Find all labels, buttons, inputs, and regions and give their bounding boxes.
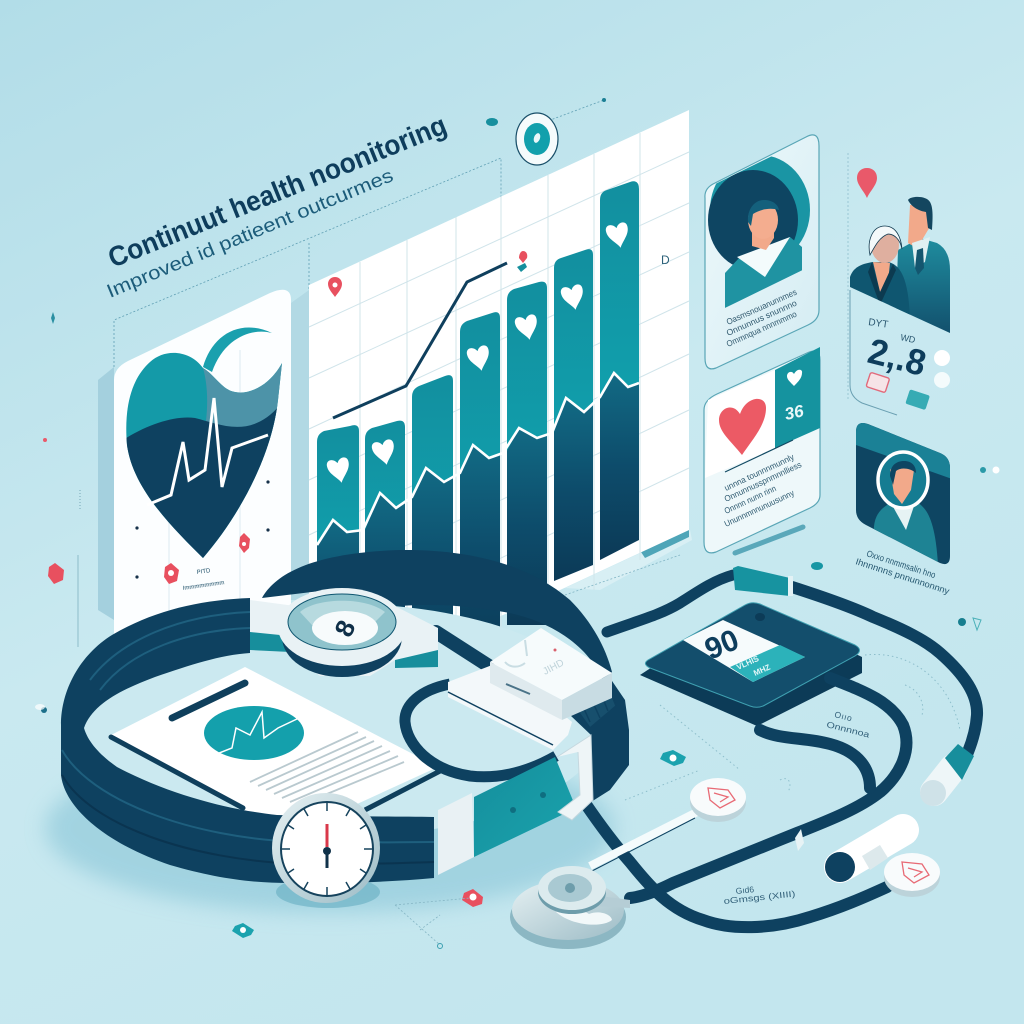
- cable ring: [795, 829, 804, 851]
- icon: target circle: [516, 113, 558, 165]
- panel: bar chart: [309, 110, 689, 700]
- left belt band: [61, 598, 434, 883]
- device: monitor: MHZ: [752, 663, 772, 678]
- value: 36: [783, 401, 806, 424]
- bar 6: [554, 249, 593, 581]
- subtitle: Improved id patieent outcurmes: [104, 165, 396, 303]
- small caption: PITD: [196, 568, 211, 576]
- cables to stethoscope: [585, 678, 906, 927]
- device: watch: 8: [328, 616, 362, 641]
- caption near monitor: Onnnnoa: [826, 719, 871, 740]
- chart markers: [328, 251, 670, 297]
- panel: heart rate card: Ununnmnnunuusunny: [723, 487, 796, 529]
- electrode 1: [690, 778, 746, 822]
- card text: Onnunnus snunnno: [725, 298, 798, 338]
- device: monitor: VLHIS: [735, 654, 761, 672]
- belt shadow: [45, 743, 615, 913]
- electrode 2: [884, 853, 940, 897]
- right belt band: [568, 678, 629, 802]
- panel: heart rate card: [704, 347, 820, 553]
- floor markers: [232, 562, 823, 948]
- caption near monitor: [826, 709, 871, 740]
- belt stripes: [62, 612, 434, 864]
- device: monitor: [640, 603, 862, 726]
- caption near stethoscope: Gıd6: [735, 884, 755, 896]
- icon: red marker left: [48, 563, 64, 584]
- portrait caption: Oxxo nnmmsalin hno: [865, 548, 937, 580]
- portrait caption: Ihnnnnns pnnunnonnny: [854, 556, 951, 596]
- trend line: [333, 263, 507, 418]
- big number: 2,.8: [864, 330, 930, 384]
- panel: heart rate card: Onnunnusspnmnnlliess: [723, 459, 803, 504]
- wave line: [317, 373, 639, 545]
- caption near stethoscope: [723, 884, 796, 906]
- small caption: Immmmmmmm: [182, 580, 225, 592]
- small caption: [182, 568, 225, 592]
- paper report: [111, 667, 442, 830]
- small cable loop: [405, 684, 556, 777]
- device: sensor module: JIHD: [541, 657, 566, 678]
- device: watch: [250, 588, 438, 677]
- teal strap: [474, 757, 574, 857]
- cable connector: [733, 566, 793, 596]
- caption near monitor: Oııo: [834, 709, 853, 723]
- panel: heart rate card: unnna tounnnmunnly: [723, 451, 796, 493]
- bar 3: [412, 375, 453, 680]
- paper text lines: [250, 732, 404, 806]
- device: sensor module: [448, 628, 612, 750]
- stats panel: DYT: [868, 317, 889, 331]
- dotted arc details: [625, 654, 960, 800]
- panel: patient card: [705, 135, 819, 369]
- caption near stethoscope: oGmsgs (XIIII): [723, 888, 796, 906]
- portrait: [708, 155, 810, 308]
- panel: heart rate card: Onnnn nunn rinn: [723, 483, 778, 516]
- bar 5: [507, 282, 547, 625]
- bar 1: [317, 425, 359, 680]
- stethoscope chest piece: [510, 866, 630, 949]
- chart grid: [309, 133, 689, 680]
- chart markers: D: [661, 253, 670, 267]
- portrait card: [856, 423, 950, 564]
- pen cylinder: [825, 830, 903, 882]
- bar 2: [365, 421, 405, 680]
- icon: red heart: [719, 399, 766, 455]
- teal shelf under cards: [735, 527, 803, 553]
- cable from watch: [436, 632, 492, 668]
- icon: red pin: [857, 168, 877, 198]
- paper chart: [204, 706, 304, 760]
- bar 4: [460, 312, 500, 660]
- monitor reading: 90: [700, 623, 744, 666]
- bar 7: [600, 181, 639, 560]
- decorative guides and small markers: [35, 98, 1000, 713]
- card text: Ommnqua nnnmmmo: [725, 309, 798, 349]
- card text: [725, 287, 798, 349]
- floor inside the belt: [83, 604, 607, 836]
- electrode stem: [590, 812, 697, 866]
- stats panel: [850, 290, 950, 415]
- buckle: [557, 735, 593, 820]
- strap keeper: [438, 793, 474, 875]
- title: Continuut health noonitoring: [104, 109, 451, 274]
- icon: stylised heart: [126, 328, 282, 558]
- couple portrait: [850, 197, 950, 335]
- back band of belt: [262, 550, 612, 680]
- panel: heart card: [98, 290, 309, 640]
- cable end cap: [920, 744, 974, 806]
- clock: [272, 793, 380, 908]
- cable: upper loop: [607, 575, 977, 752]
- stats panel: WD: [900, 332, 917, 345]
- card text: Oasmsnouanunnmes: [725, 287, 798, 327]
